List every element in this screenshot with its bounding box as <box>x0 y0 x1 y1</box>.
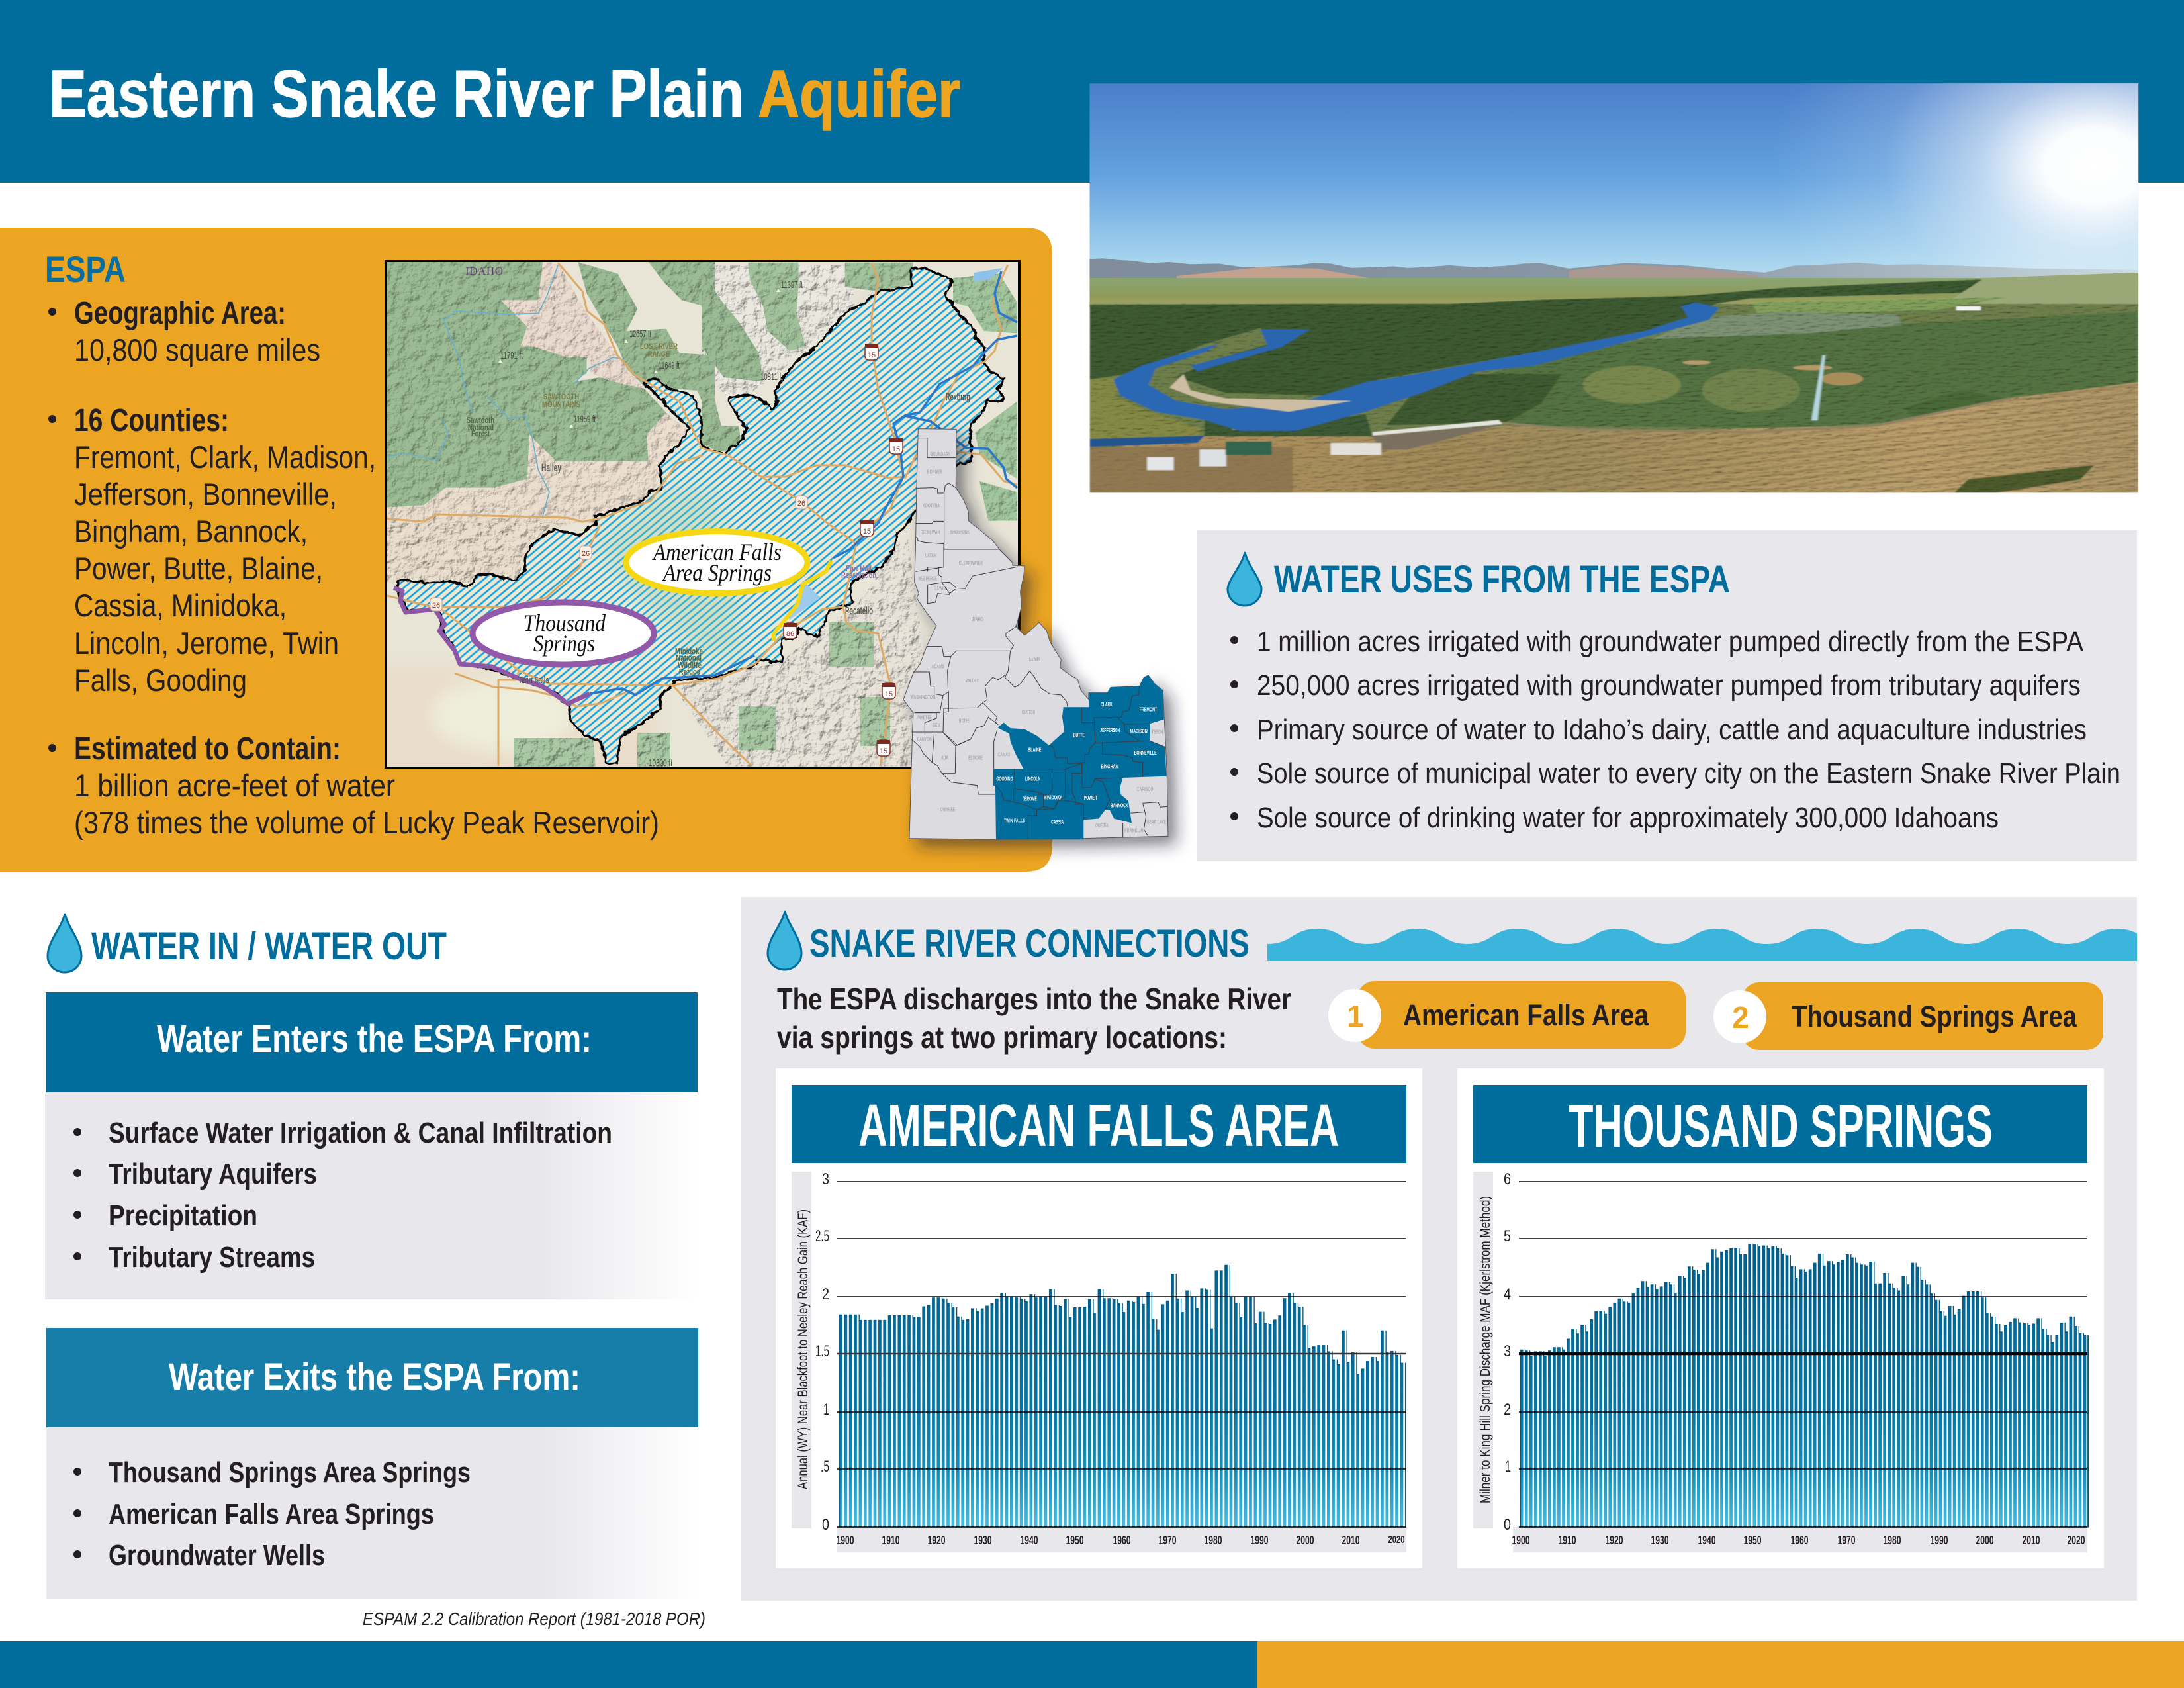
gridlines and axis labels: 1930 <box>974 1534 991 1547</box>
panel: ESPA facts <box>0 228 1052 872</box>
citation: ESPAM 2.2 Calibration Report (1981-2018 POR) <box>363 1609 705 1629</box>
panel: American Falls chart <box>776 1068 1422 1568</box>
county names: SHOSHONE <box>950 529 970 535</box>
county names: CASSIA <box>1051 820 1064 825</box>
county names: GEM <box>933 722 940 728</box>
map: highway shields <box>430 344 903 756</box>
map: place labels: 11649 ft <box>659 360 680 371</box>
pill: American Falls Area: American Falls Area <box>1403 998 1649 1032</box>
map: highway shields: 26 <box>432 602 440 610</box>
map: place labels: Refuge <box>679 667 700 677</box>
chart heading <box>1473 1085 2087 1163</box>
county names: CUSTER <box>1022 710 1035 716</box>
map: place labels: RANGE <box>648 350 670 359</box>
county names: LEMHI <box>1029 656 1040 662</box>
pill: Thousand Springs Area <box>1713 982 2103 1050</box>
heading: ESPA: ESPA <box>45 248 126 290</box>
county names: GOODING <box>996 776 1013 782</box>
map: place labels: 10811 ft <box>760 371 784 383</box>
map: place labels: MOUNTAINS <box>542 400 580 409</box>
county names: TWIN FALLS <box>1004 818 1025 824</box>
intro text <box>777 982 1291 1055</box>
chart heading <box>792 1085 1406 1163</box>
map: highway shields: 15 <box>892 445 900 453</box>
icon: water drop <box>768 911 801 970</box>
map: highway shields: 86 <box>786 630 794 638</box>
heading: water in water out: WATER IN / WATER OUT <box>91 925 447 968</box>
heading: water uses: WATER USES FROM THE ESPA <box>1274 558 1730 601</box>
county names: CAMAS <box>997 752 1011 758</box>
list: enters: Tributary Streams <box>109 1241 315 1274</box>
list: water uses <box>1230 626 2120 834</box>
county names: BLAINE <box>1028 747 1042 753</box>
county names: BOUNDARY <box>931 451 951 457</box>
icon: water drop <box>1228 552 1261 606</box>
list: exits: Groundwater Wells <box>109 1539 325 1571</box>
bullet: geographic area: 10,800 square miles <box>74 332 320 367</box>
gridlines and axis labels: 4 <box>1504 1286 1511 1303</box>
county names: TETON <box>1152 729 1163 735</box>
bullet: counties: Cassia, Minidoka, <box>74 588 287 623</box>
bullet: geographic area <box>48 296 320 367</box>
title: Eastern Snake River Plain <box>49 57 744 131</box>
map: highway shields: 26 <box>582 550 590 558</box>
gridlines and axis labels: 1.5 <box>815 1342 829 1360</box>
map: basalt plain tint <box>596 490 741 655</box>
gridlines and axis labels: 1970 <box>1837 1534 1856 1547</box>
header band <box>0 0 2184 183</box>
ESPA counties highlighted <box>993 675 1167 839</box>
county names: FRANKLIN <box>1124 827 1143 833</box>
map: place labels: 11959 ft <box>574 414 596 425</box>
gridlines and axis labels: 2020 <box>2068 1534 2085 1547</box>
list: exits: American Falls Area Springs <box>109 1498 434 1530</box>
x axis band <box>1513 1527 2087 1552</box>
gridlines and axis labels: 1910 <box>882 1534 900 1547</box>
pill: Thousand Springs Area: 2 <box>1732 1000 1749 1035</box>
list: water uses: Sole source of drinking water for approximately 300,000 Idahoans <box>1257 802 1999 834</box>
map: place labels: 10300 ft <box>649 757 673 769</box>
gridlines and axis labels: 2 <box>1504 1401 1511 1419</box>
bullet: counties: Bingham, Bannock, <box>74 514 308 549</box>
photo: aerial view of river and farmland <box>1089 83 2139 492</box>
county names: BONNER <box>927 469 942 475</box>
county names: CLARK <box>1101 702 1113 708</box>
map: highways <box>384 263 1017 766</box>
map: aquifer extent <box>371 260 1021 781</box>
gridlines and axis labels: 2 <box>822 1286 829 1303</box>
gridlines and axis labels: 2010 <box>1342 1534 1359 1547</box>
list: exits <box>73 1456 471 1571</box>
list: enters: Tributary Aquifers <box>109 1158 317 1190</box>
gridlines and axis labels: 3 <box>822 1170 829 1188</box>
map: place labels: National <box>468 422 494 432</box>
map: place labels: Fort Hall <box>846 563 872 573</box>
list: enters: Surface Water Irrigation & Canal Infiltration <box>109 1117 612 1149</box>
county names: ADAMS <box>931 663 945 669</box>
county names: PAYETTE <box>917 715 932 721</box>
bar chart: Thousand Springs <box>1518 1238 2088 1527</box>
county names: ADA <box>941 755 948 761</box>
map: highway shields: 15 <box>868 352 876 359</box>
header: water enters: Water Enters the ESPA From: <box>157 1017 592 1060</box>
map: mountain terrain, right <box>702 263 1017 521</box>
bullet: counties: Power, Butte, Blaine, <box>74 551 323 586</box>
bullet: counties <box>48 403 376 698</box>
county names: CLEARWATER <box>959 560 983 566</box>
y axis title <box>792 1172 811 1528</box>
map: Snake River <box>590 271 1017 695</box>
bullet: geographic area: Geographic Area: <box>74 296 286 331</box>
county names: IDAHO <box>972 616 983 622</box>
icon: water drop <box>48 914 81 972</box>
county names: BEAR LAKE <box>1147 819 1167 825</box>
map: place labels: Wildlife <box>678 660 702 670</box>
gridlines and axis labels: 1 <box>1505 1458 1511 1476</box>
bar chart: American Falls <box>837 1258 1406 1527</box>
county names: OWYHEE <box>940 806 956 812</box>
bullet: counties: Falls, Gooding <box>74 663 247 698</box>
bullet: estimated volume: 1 billion acre-feet of water <box>74 768 395 803</box>
bullet: counties: Lincoln, Jerome, Twin <box>74 626 339 661</box>
map: place labels: SAWTOOTH <box>543 392 579 401</box>
county names: CARIBOU <box>1137 786 1153 792</box>
gridlines and axis labels: 1960 <box>1791 1534 1808 1547</box>
list: enters <box>73 1117 612 1274</box>
header: water exits <box>46 1328 698 1427</box>
y axis title <box>1473 1172 1493 1528</box>
header: water enters <box>46 992 698 1092</box>
map: place labels: Hailey <box>541 461 561 474</box>
gridlines and axis labels: 1900 <box>837 1534 854 1547</box>
list background: exits <box>46 1427 698 1599</box>
callout: American Falls Area Springs <box>626 531 807 593</box>
list: enters: Precipitation <box>109 1199 257 1232</box>
map: place labels: IDAHO <box>465 265 503 277</box>
list: water uses: Primary source of water to Idaho’s dairy, cattle and aquaculture industries <box>1257 714 2087 746</box>
map: place labels: Pocatello <box>845 604 873 617</box>
gridlines and axis labels: 1980 <box>1884 1534 1901 1547</box>
map: aquifer boundary <box>397 268 1004 763</box>
footer band: blue <box>0 1641 1257 1688</box>
map: lake <box>974 268 1003 281</box>
list background: enters <box>45 1092 698 1299</box>
county names: WASHINGTON <box>910 694 935 700</box>
gridlines and axis labels: 1970 <box>1158 1534 1177 1547</box>
footer band: orange <box>1257 1641 2184 1688</box>
county names: JEROME <box>1023 796 1037 802</box>
gridlines and axis labels: .5 <box>821 1458 829 1476</box>
gridlines and axis labels: 1930 <box>1651 1534 1669 1547</box>
map: place labels: 11397 ft <box>781 279 803 291</box>
chart heading: AMERICAN FALLS AREA <box>858 1093 1339 1159</box>
gridlines and axis labels: 1900 <box>1512 1534 1530 1547</box>
map: place labels: 12657 ft <box>629 328 652 340</box>
map: peak markers <box>498 289 780 428</box>
county names: ELMORE <box>968 755 983 761</box>
county names: NEZ PERCE <box>918 576 937 582</box>
gridlines and axis labels: 2.5 <box>815 1227 829 1245</box>
callout: American Falls Area Springs: American Falls <box>652 539 782 565</box>
map: highway shields: 15 <box>885 690 893 698</box>
list: water uses: 1 million acres irrigated with groundwater pumped directly from the ESPA <box>1257 626 2084 658</box>
county names: BUTTE <box>1073 732 1085 738</box>
map: highway shields: 26 <box>797 500 805 508</box>
chart heading: THOUSAND SPRINGS <box>1569 1094 1993 1160</box>
gridlines and axis labels: 1990 <box>1930 1534 1948 1547</box>
pill: American Falls Area <box>1328 981 1686 1049</box>
gridlines and axis labels: 6 <box>1504 1170 1511 1188</box>
map: mountain terrain, left <box>386 262 715 523</box>
map: Idaho counties <box>903 429 1168 839</box>
y axis title: Annual (WY) Near Blackfoot to Neeley Reach Gain (KAF) <box>796 1209 811 1489</box>
county names: BINGHAM <box>1101 764 1119 770</box>
panel: Thousand Springs chart <box>1457 1068 2104 1568</box>
bullet: estimated volume: Estimated to Contain: <box>74 731 341 767</box>
map: aquifer hatch <box>397 268 1004 763</box>
map: mountain streams <box>387 265 624 516</box>
gridlines and axis labels: 2000 <box>1296 1534 1314 1547</box>
map: place labels: LOST RIVER <box>640 342 678 351</box>
map: place labels: Sawtooth <box>467 415 494 425</box>
gridlines and axis labels: 0 <box>822 1516 829 1534</box>
county names: BANNOCK <box>1111 803 1128 809</box>
map: place labels: 11791 ft <box>500 350 523 361</box>
panel: water uses <box>1197 530 2137 861</box>
gridlines and axis labels <box>1504 1170 2087 1547</box>
callout: American Falls Area Springs: Area Springs <box>662 559 772 586</box>
county names: LATAH <box>925 553 936 559</box>
bullet: counties: Fremont, Clark, Madison, <box>74 440 376 475</box>
pill: American Falls Area: 1 <box>1347 999 1364 1033</box>
panel: water in / water out <box>45 914 705 1629</box>
gridlines and axis labels: 1940 <box>1021 1534 1038 1547</box>
county names: CANYON <box>917 736 932 742</box>
county lines <box>911 438 1167 839</box>
pill: Thousand Springs Area: Thousand Springs Area <box>1792 1000 2077 1033</box>
gridlines and axis labels: 0 <box>1504 1516 1511 1534</box>
title accent: Aquifer <box>758 57 960 131</box>
heading: Snake River connections: SNAKE RIVER CONNECTIONS <box>809 922 1250 965</box>
gridlines and axis labels: 1990 <box>1251 1534 1268 1547</box>
map: place labels: Minidoka <box>675 646 704 656</box>
county names: MINIDOKA <box>1044 794 1062 800</box>
gridlines and axis labels: 1980 <box>1205 1534 1222 1547</box>
gridlines and axis labels: 5 <box>1504 1227 1511 1245</box>
map: highway shields: 15 <box>863 528 871 536</box>
wave graphic <box>1267 929 2167 961</box>
map: place labels: Forest <box>471 428 490 438</box>
bullet: counties: 16 Counties: <box>74 403 229 438</box>
gridlines and axis labels: 2000 <box>1976 1534 1993 1547</box>
county names <box>910 451 1167 833</box>
county names: FREMONT <box>1140 706 1157 712</box>
gridlines and axis labels: 3 <box>1504 1342 1511 1360</box>
gridlines and axis labels: 1 <box>823 1401 829 1419</box>
header: water exits: Water Exits the ESPA From: <box>169 1356 580 1399</box>
map: place labels: Reservation <box>841 570 876 580</box>
gridlines and axis labels: 1940 <box>1698 1534 1715 1547</box>
map: highway shields: 15 <box>880 747 887 755</box>
county names: JEFFERSON <box>1100 727 1120 733</box>
bullet: estimated volume: (378 times the volume of Lucky Peak Reservoir) <box>74 805 659 840</box>
callout: Thousand Springs <box>473 602 654 665</box>
y axis title: Milner to King Hill Spring Discharge MAF (Kjerlstrom Method) <box>1478 1196 1493 1503</box>
map: American Falls Reservoir <box>789 581 821 620</box>
map: place labels: Twin Falls <box>518 675 549 686</box>
county names: KOOTENAI <box>923 503 940 509</box>
bullet: estimated volume <box>48 731 659 840</box>
gridlines and axis labels: 1960 <box>1113 1534 1130 1547</box>
gridlines and axis labels: 2010 <box>2023 1534 2040 1547</box>
county names: LEWIS <box>934 586 946 592</box>
county names: BONNEVILLE <box>1134 750 1157 756</box>
list: water uses: 250,000 acres irrigated with groundwater pumped from tributary aquifers <box>1257 669 2081 702</box>
map: place labels <box>465 265 970 769</box>
list: exits: Thousand Springs Area Springs <box>109 1456 471 1489</box>
map: forest blocks, south <box>514 622 890 767</box>
county names: BENEWAH <box>922 530 940 536</box>
map: place labels: National <box>676 653 702 663</box>
gridlines and axis labels: 1950 <box>1066 1534 1084 1547</box>
gridlines and axis labels: 1910 <box>1558 1534 1576 1547</box>
map: Thousand Springs reach <box>394 588 590 704</box>
county names: ONEIDA <box>1095 823 1109 829</box>
gridlines and axis labels: 2020 <box>1388 1534 1405 1546</box>
gridlines and axis labels <box>815 1170 1406 1547</box>
bullet: counties: Jefferson, Bonneville, <box>74 477 337 512</box>
gridlines and axis labels: 1920 <box>928 1534 945 1547</box>
county names: BOISE <box>959 718 970 724</box>
callout: Thousand Springs: Thousand <box>523 610 606 636</box>
intro text: via springs at two primary locations: <box>777 1020 1227 1055</box>
x axis band <box>837 1527 1406 1552</box>
map: American Falls reach <box>774 561 831 641</box>
panel: Snake River connections <box>741 897 2167 1601</box>
county names: POWER <box>1084 795 1097 801</box>
county names: VALLEY <box>966 678 979 684</box>
gridlines and axis labels: 1920 <box>1606 1534 1623 1547</box>
county names: LINCOLN <box>1025 776 1040 782</box>
map: place labels: Rexburg <box>946 391 970 403</box>
county names: MADISON <box>1130 729 1148 735</box>
intro text: The ESPA discharges into the Snake River <box>777 982 1291 1016</box>
gridlines and axis labels: 1950 <box>1743 1534 1762 1547</box>
callout: Thousand Springs: Springs <box>533 630 595 657</box>
